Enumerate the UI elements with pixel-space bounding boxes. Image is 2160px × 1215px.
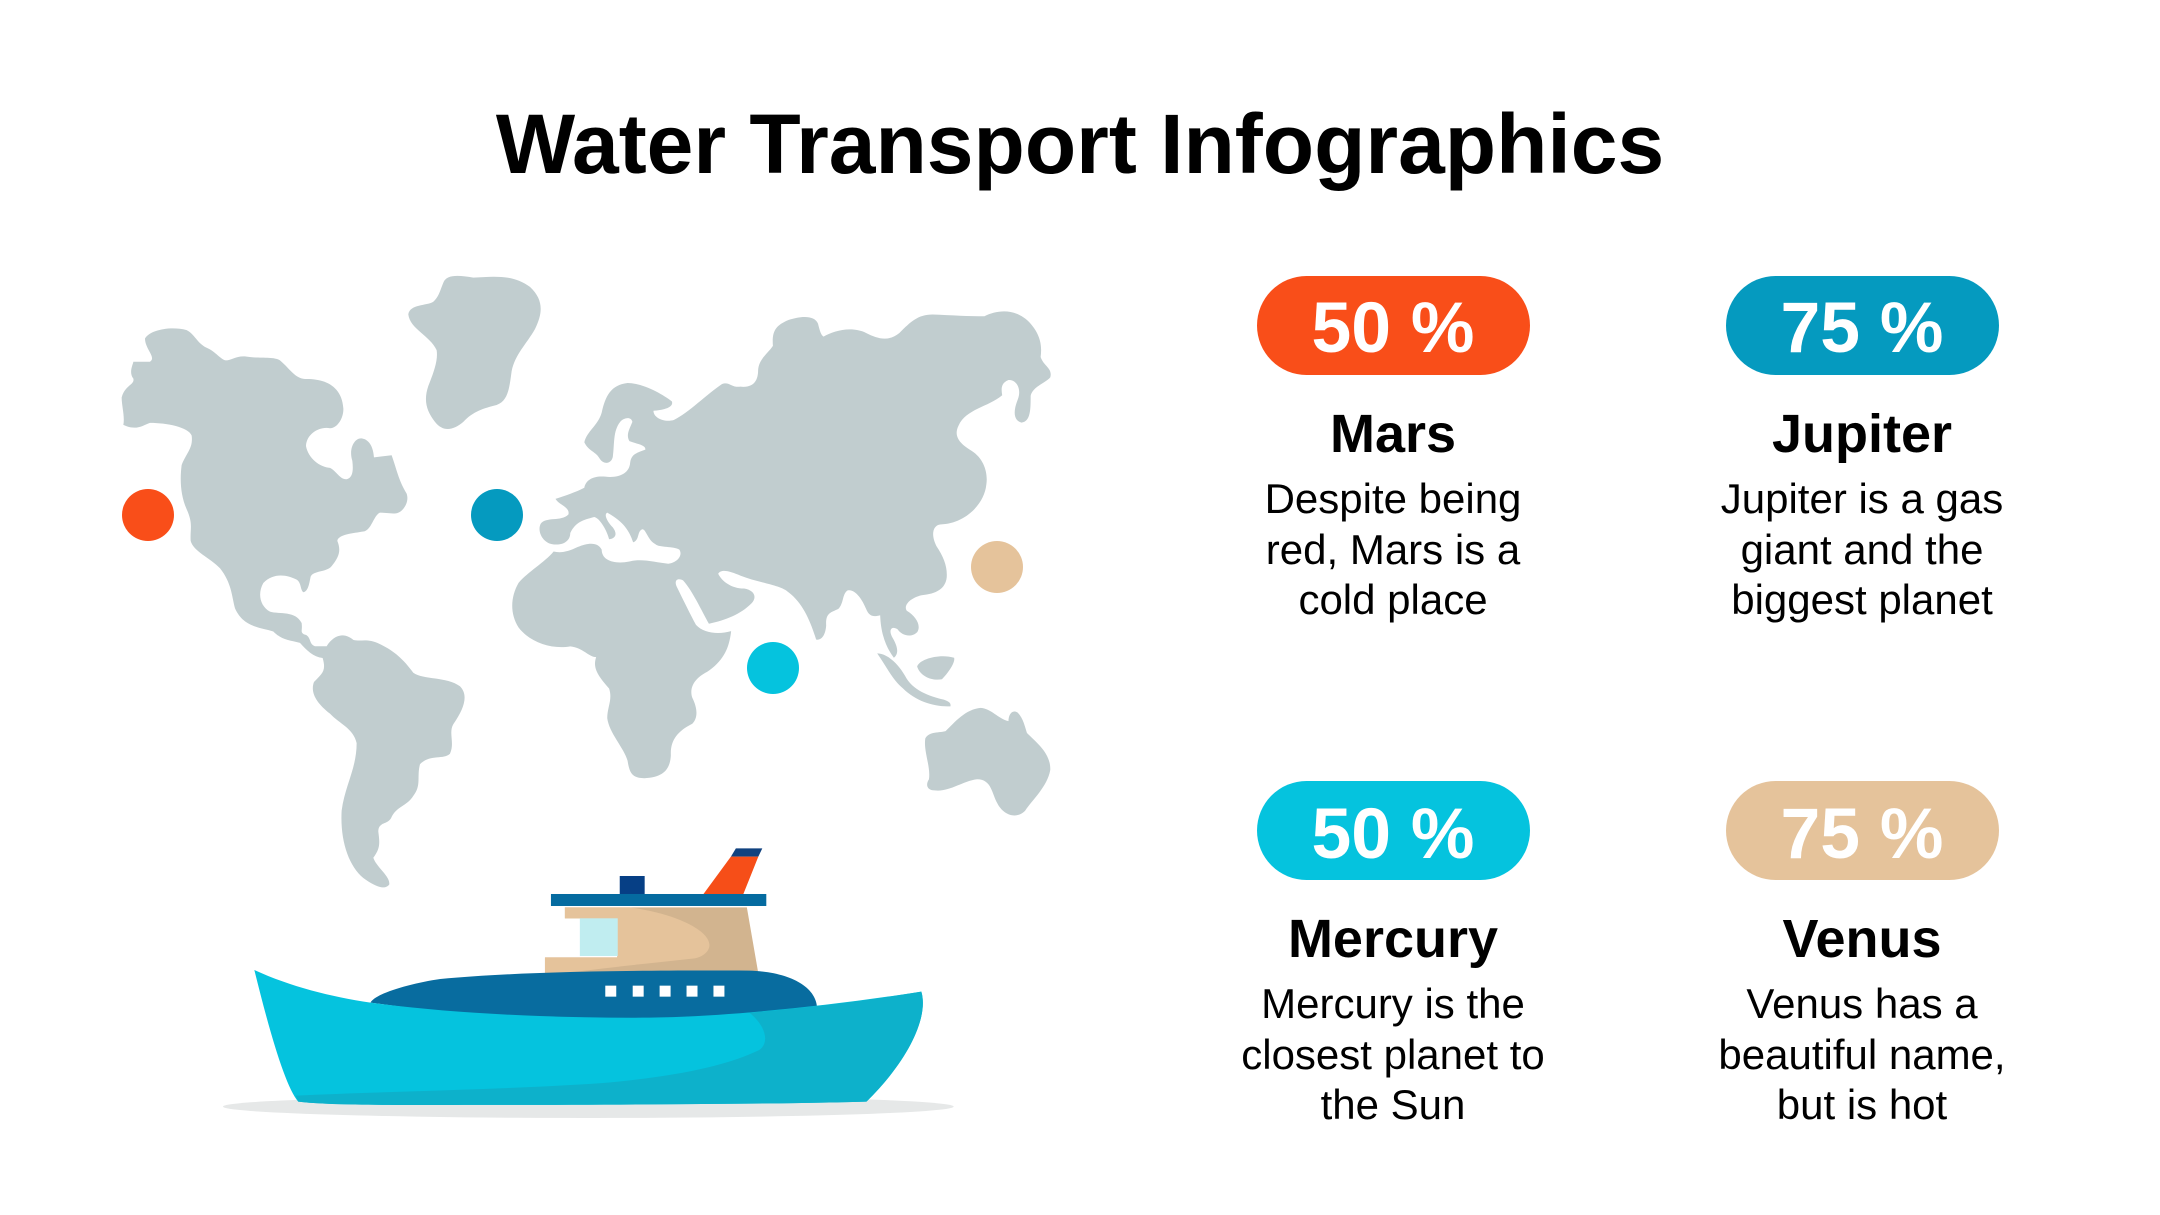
pill: 50 %: 50 % <box>1312 288 1474 368</box>
description: Mercury: Mercury is the <box>1261 980 1525 1027</box>
cabin back <box>545 907 758 973</box>
card: Mars <box>1257 276 1530 623</box>
description: Jupiter: giant and the <box>1741 526 1983 573</box>
continent: Eurasia and Africa <box>512 311 1051 778</box>
map marker: red <box>122 489 174 541</box>
description: Mercury: the Sun <box>1321 1081 1465 1128</box>
title: Water Transport Infographics <box>496 97 1664 191</box>
map marker: tan <box>971 541 1023 593</box>
description: Venus: Venus has a <box>1746 980 1978 1027</box>
pill: 75 % <box>1726 276 1999 375</box>
ship deck <box>370 971 817 1020</box>
world map <box>122 276 1051 887</box>
cabin front <box>545 907 709 973</box>
ship shadow <box>223 1095 954 1118</box>
pill: 75 % <box>1726 781 1999 880</box>
continent: Australia <box>925 708 1050 815</box>
pill: 75 %: 75 % <box>1781 288 1943 368</box>
heading: Mercury: Mercury <box>1288 909 1498 969</box>
hull <box>254 970 923 1105</box>
description: Mercury: closest planet to <box>1241 1031 1545 1078</box>
hull shade <box>296 992 923 1105</box>
card: Venus <box>1718 781 2006 1128</box>
ship mast block <box>620 876 645 894</box>
ship illustration <box>223 848 954 1118</box>
continent: Americas <box>122 328 465 887</box>
card: Jupiter <box>1721 276 2003 623</box>
continent: Greenland <box>408 276 541 429</box>
island: Borneo <box>917 656 954 680</box>
description: Venus: beautiful name, <box>1718 1031 2006 1078</box>
description: Jupiter: biggest planet <box>1731 576 1993 623</box>
description: Jupiter: Jupiter is a gas <box>1721 475 2003 522</box>
description: Venus: but is hot <box>1777 1081 1948 1128</box>
ship funnel <box>703 857 758 894</box>
heading: Venus: Venus <box>1782 909 1942 969</box>
map marker: blue <box>471 489 523 541</box>
description: Mars: red, Mars is a <box>1266 526 1521 573</box>
pill: 75 %: 75 % <box>1781 794 1943 874</box>
pill: 50 % <box>1257 276 1530 375</box>
heading: Jupiter: Jupiter <box>1772 404 1952 464</box>
pill: 50 % <box>1257 781 1530 880</box>
ship funnel top <box>731 848 762 857</box>
heading: Mars: Mars <box>1330 404 1456 464</box>
card: Mercury <box>1241 781 1545 1128</box>
islands: Indonesia <box>877 653 951 706</box>
description: Mars: cold place <box>1298 576 1488 623</box>
description: Mars: Despite being <box>1265 475 1521 522</box>
map marker: cyan <box>747 642 799 694</box>
pill: 50 %: 50 % <box>1312 794 1474 874</box>
ship roof <box>551 894 766 906</box>
portholes <box>605 986 724 997</box>
cabin window <box>580 918 618 956</box>
